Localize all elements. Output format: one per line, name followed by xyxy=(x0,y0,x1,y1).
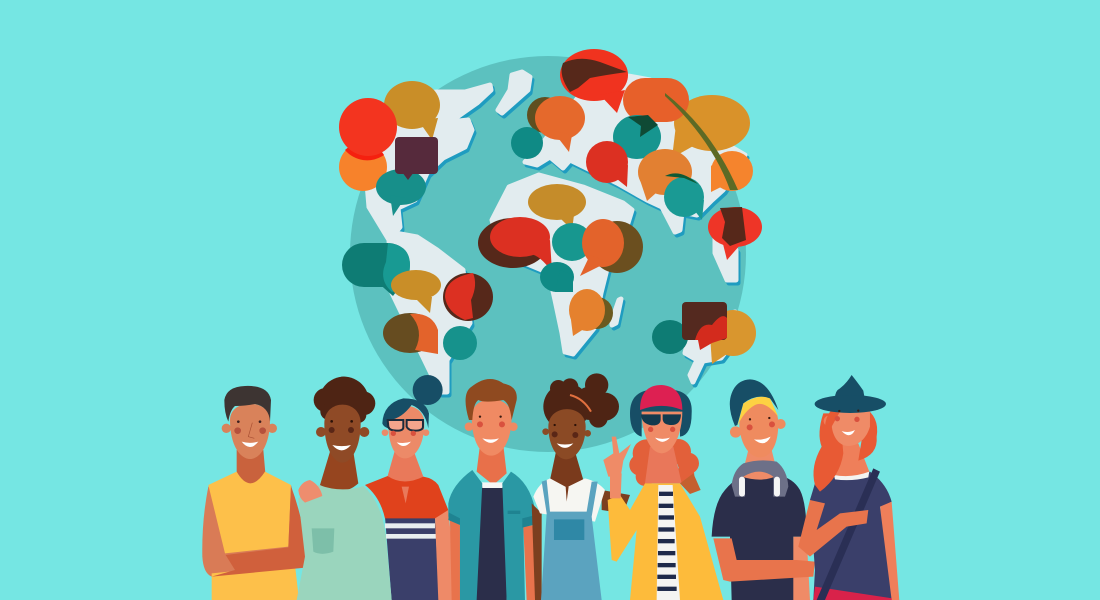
person 7: navy t-shirt with headphones xyxy=(712,379,815,600)
person 5: denim overalls xyxy=(532,373,630,600)
globe xyxy=(350,56,746,452)
speech bubbles: north america xyxy=(339,81,440,216)
world map continents xyxy=(367,72,747,395)
speech bubbles: africa xyxy=(478,184,643,336)
person 3: red and navy striped top xyxy=(365,375,453,600)
person 8: navy top with hat and orange hair xyxy=(798,375,899,600)
person 4: teal shirt xyxy=(448,379,542,600)
person 1: yellow tank top xyxy=(202,386,309,600)
speech bubbles: south america xyxy=(342,243,493,360)
speech bubbles: australia xyxy=(652,302,756,364)
speech bubbles: eurasia xyxy=(511,49,762,260)
person 6: yellow jacket with pink cap xyxy=(603,385,723,600)
person 2: mint t-shirt xyxy=(297,377,392,600)
